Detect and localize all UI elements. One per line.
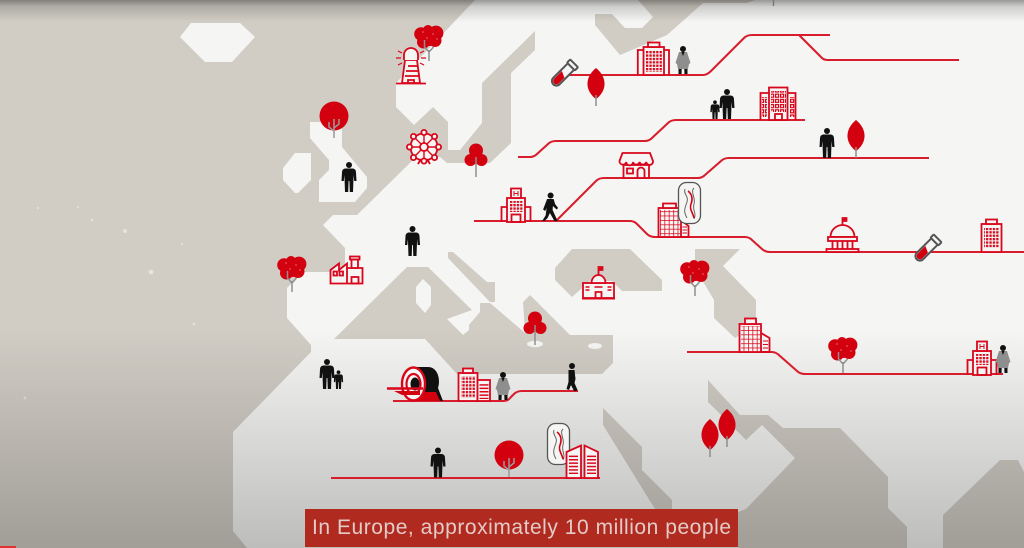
- icon: open building bottom: [566, 446, 598, 478]
- caption: In Europe, approximately 10 million people: [312, 516, 731, 539]
- island: Iceland: [180, 23, 255, 62]
- icon: lobed tree far east: [828, 337, 857, 373]
- icon: round tree bottom: [494, 440, 524, 477]
- icon: adult and child south: [320, 359, 343, 389]
- icon: person Britain: [342, 162, 356, 192]
- island: Ireland: [283, 153, 311, 193]
- icon: capitol right: [826, 218, 858, 252]
- icon: DNA bubble centre: [678, 182, 700, 224]
- sea: Atlantic and Baltic: [0, 0, 535, 548]
- icon: adult and child: [710, 89, 734, 119]
- red route lines: [331, 35, 1024, 478]
- speckles: [24, 206, 195, 399]
- sea: Caspian: [695, 249, 756, 338]
- route: fourth: [474, 221, 1024, 252]
- tree stem at top edge: [772, 0, 774, 6]
- icon: ferris wheel: [407, 130, 441, 164]
- island: Crete: [527, 341, 543, 347]
- sea: Mediterranean: [334, 267, 613, 374]
- map: islands: [180, 23, 602, 349]
- icon: round tree Britain: [320, 102, 348, 138]
- route: bottom: [331, 477, 600, 479]
- icon: leaf tree right: [847, 120, 865, 158]
- icon: test tube right: [913, 235, 941, 263]
- icon: person bottom: [430, 448, 446, 478]
- icon: cone tree Greece: [524, 312, 546, 345]
- icon: apartment building: [760, 88, 796, 120]
- sea: Black Sea: [555, 249, 662, 297]
- icon: person France: [405, 226, 420, 256]
- caption: [305, 509, 738, 547]
- icon: person in coat south: [496, 372, 510, 400]
- icon: person right: [820, 128, 834, 158]
- icon: lobed tree east: [680, 260, 709, 296]
- video progress bar: [0, 546, 16, 548]
- icon: MRI scanner: [387, 367, 443, 401]
- sea: Red Sea: [603, 408, 672, 548]
- island: Corsica: [416, 279, 431, 313]
- route: top: [567, 35, 959, 75]
- icon: leaf tree top: [587, 68, 605, 106]
- icon: capitol Turkey: [582, 267, 615, 298]
- icon: hospital: [502, 188, 530, 222]
- icon: office building south: [458, 368, 490, 401]
- icon: test tube top: [549, 60, 578, 88]
- icon: two leaf trees: [701, 409, 736, 457]
- icon: tall building east: [740, 318, 770, 352]
- icon: small building right: [982, 220, 1002, 252]
- sea: far right: [943, 460, 1024, 548]
- route: fifth: [687, 352, 1003, 374]
- island: Cyprus: [588, 343, 602, 349]
- icon: lighthouse: [396, 48, 426, 84]
- icon: person in coat top: [676, 46, 690, 74]
- route: third: [557, 158, 929, 220]
- icon: hospital east: [968, 342, 996, 375]
- icon: office building top: [638, 42, 669, 75]
- icon: factory: [330, 256, 362, 284]
- route: sixth: [393, 391, 578, 401]
- sea: Persian Gulf area: [708, 380, 907, 548]
- route: second: [518, 120, 805, 157]
- island: Great Britain: [310, 122, 367, 202]
- icon: person in coat east: [996, 345, 1010, 373]
- sea: Adriatic: [448, 252, 495, 302]
- icon: lobed tree west: [277, 256, 306, 292]
- icon: cone tree north: [464, 144, 488, 177]
- icon: tall building centre: [658, 204, 688, 237]
- icon: shop: [619, 153, 653, 178]
- icon: walking person: [542, 192, 558, 221]
- sea: Arctic inlet: [595, 0, 755, 55]
- icon: lobed tree north: [414, 25, 443, 61]
- icon: walking person south: [566, 363, 578, 391]
- icon: DNA bubble bottom: [548, 424, 570, 464]
